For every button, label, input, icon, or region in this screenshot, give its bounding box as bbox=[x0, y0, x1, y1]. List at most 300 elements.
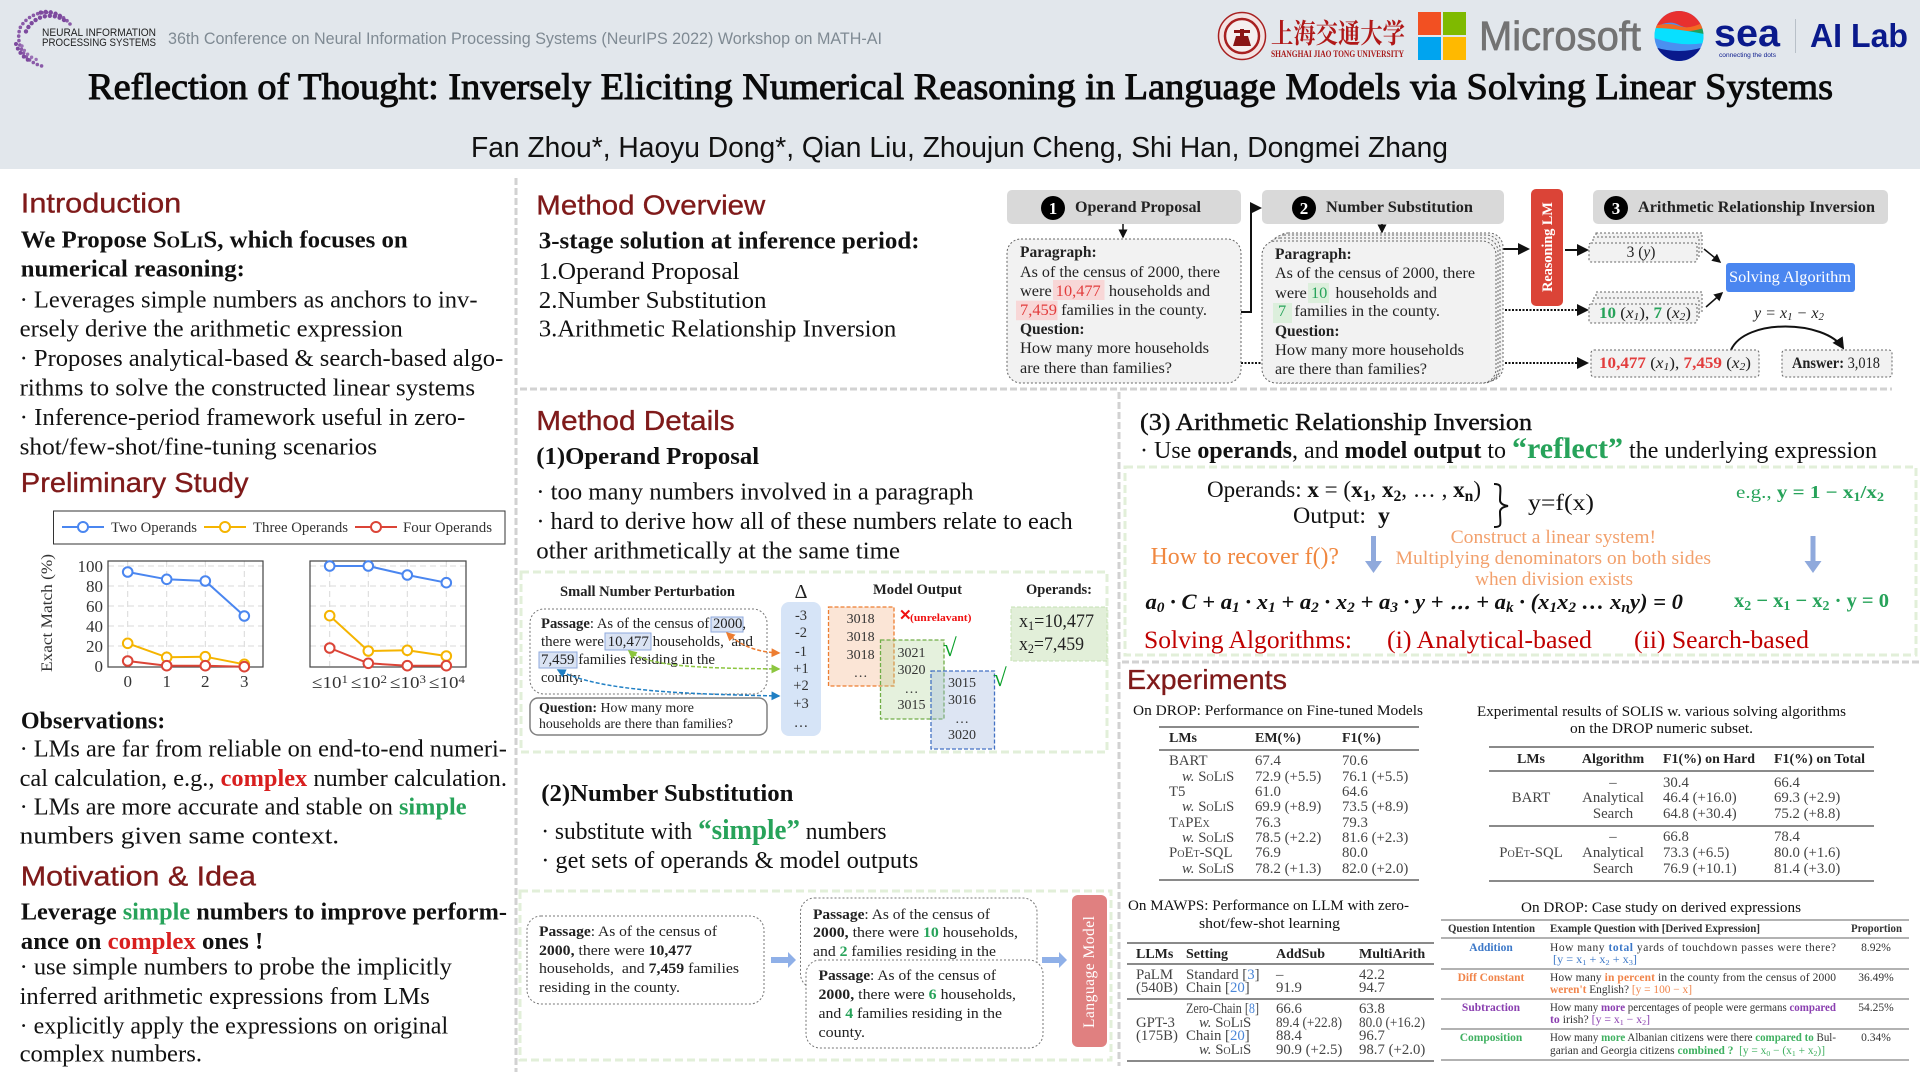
stage 1 header: Operand Proposal bbox=[1075, 199, 1202, 216]
table: DROP fine-tuned: LMs bbox=[1169, 731, 1198, 746]
Solving Algorithm box: Solving Algorithm bbox=[1729, 269, 1851, 286]
line chart: exact match by decimal places: 60 bbox=[86, 597, 103, 616]
row: subtraction: Subtraction bbox=[1462, 1002, 1521, 1014]
table: MAWPS zero-shot: 88.4 bbox=[1276, 1028, 1302, 1044]
table: MAWPS zero-shot: 80.0 (+16.2) bbox=[1359, 1015, 1425, 1031]
unrelevant mark: ✕ bbox=[899, 608, 912, 624]
text block: three stages: 3-stage solution at inference period: bbox=[539, 228, 920, 255]
table: solving algorithms: F1(%) on Total bbox=[1774, 752, 1865, 767]
line chart: exact match by magnitude: ≤10 4 bbox=[429, 673, 465, 692]
table: solving algorithms: 30.4 bbox=[1663, 775, 1689, 791]
table: MAWPS zero-shot: AddSub bbox=[1276, 947, 1325, 962]
title: Reflection of Thought: Inversely Eliciting Numerical Reasoning in Language Models via Solving Linear Systems bbox=[88, 67, 1833, 108]
text block: motivation: · use simple numbers to probe the implicitly bbox=[20, 954, 453, 981]
text block: number substitution bbox=[541, 780, 918, 874]
table: DROP fine-tuned: 64.6 bbox=[1342, 784, 1368, 800]
column headings bbox=[560, 582, 1092, 600]
table: solving algorithms: Analytical bbox=[1582, 845, 1644, 861]
table: solving algorithms: F1(%) on Hard bbox=[1663, 752, 1755, 767]
table: solving algorithms bbox=[1477, 704, 1874, 881]
text block: observations bbox=[20, 708, 507, 850]
table: DROP fine-tuned: w. SoLiS bbox=[1182, 769, 1234, 785]
icon: Sea AI Lab logo: sea bbox=[1714, 13, 1781, 55]
passage box: Passage: As of the census of 2000, bbox=[541, 616, 746, 632]
arrow to substituted passages bbox=[771, 952, 796, 968]
table: DROP fine-tuned: 61.0 bbox=[1255, 784, 1281, 800]
model output: orange group: … bbox=[854, 666, 868, 681]
heading: arithmetic relationship inversion: · Use operands, and model output to “reflect” the underlying expression bbox=[1140, 432, 1877, 465]
stage 3 header: Arithmetic Relationship Inversion bbox=[1638, 199, 1875, 216]
paragraph box 2 bbox=[1262, 233, 1503, 383]
paragraph box 1 bbox=[1007, 239, 1241, 383]
substituted passage front: and 4 families residing in the bbox=[818, 1006, 1002, 1022]
output box: substituted operands: 10 (x1), 7 (x2) bbox=[1599, 305, 1691, 323]
table: solving algorithms: 66.8 bbox=[1663, 829, 1689, 845]
stage 3 header: 3 bbox=[1612, 199, 1620, 218]
original passage box: Passage: As of the census of bbox=[539, 924, 717, 940]
icon: Microsoft logo: Microsoft bbox=[1479, 13, 1642, 59]
text block: introduction: shot/few-shot/fine-tuning scenarios bbox=[20, 433, 377, 460]
text block: motivation: inferred arithmetic expressions from LMs bbox=[20, 983, 430, 1010]
line chart: exact match by decimal places: 3 bbox=[240, 672, 249, 691]
stage 1 header: 1 bbox=[1049, 199, 1057, 218]
table: solving algorithms: Experimental results of SOLIS w. various solving algorithms bbox=[1477, 704, 1846, 720]
legend: Four Operands bbox=[403, 520, 492, 536]
stage 2 header bbox=[1262, 190, 1504, 224]
text block: motivation: · explicitly apply the expressions on original bbox=[20, 1012, 448, 1039]
row: addition: Addition bbox=[1469, 942, 1513, 954]
legend: Two Operands bbox=[111, 520, 197, 536]
paragraph box 2: 7 families in the county. bbox=[1278, 303, 1440, 320]
panel: small number perturbation bbox=[521, 572, 1107, 752]
paragraph box 1: are there than families? bbox=[1020, 360, 1172, 377]
column headings: Small Number Perturbation bbox=[560, 584, 735, 600]
table: solving algorithms: 46.4 (+16.0) bbox=[1663, 790, 1737, 806]
row: subtraction: to irish? [y = x1 − x2] bbox=[1550, 1014, 1650, 1027]
panel: middle column text bbox=[536, 189, 1073, 874]
answer box: Answer: 3,018 bbox=[1792, 355, 1880, 372]
model output: green group: 3021 bbox=[898, 646, 926, 661]
line chart: exact match by decimal places: 2 bbox=[201, 672, 210, 691]
row: addition bbox=[1469, 942, 1891, 967]
row: diff constant: weren't English? [y = 100 − x] bbox=[1550, 984, 1692, 996]
table: MAWPS zero-shot: Chain [20] bbox=[1186, 980, 1250, 996]
model output: blue group: √ bbox=[993, 665, 1007, 692]
equation example: x2 − x1 − x2 · y = 0 bbox=[1734, 590, 1889, 613]
paragraph box 1: Question: bbox=[1020, 321, 1085, 338]
row: composition: garian and Georgia citizens combined ? [y = x0 − (x1 + x2)] bbox=[1550, 1045, 1825, 1058]
icon: Sea AI Lab logo: AI Lab bbox=[1810, 17, 1908, 54]
substituted passage back bbox=[800, 898, 1037, 988]
heading: Introduction: Introduction bbox=[21, 187, 181, 218]
text block: operand proposal: · hard to derive how all of these numbers relate to each bbox=[536, 508, 1073, 535]
table: MAWPS zero-shot: On MAWPS: Performance on LLM with zero- bbox=[1128, 898, 1409, 914]
passage box bbox=[530, 609, 767, 694]
paragraph box 1: were 10,477 households and bbox=[1020, 283, 1210, 300]
table: MAWPS zero-shot: 66.6 bbox=[1276, 1001, 1302, 1017]
text block: observations: cal calculation, e.g., complex number calculation. bbox=[20, 765, 507, 792]
passage box: county. bbox=[541, 670, 583, 686]
formula y = x1 - x2: y = x1 − x2 bbox=[1752, 305, 1825, 323]
text block: number substitution: (2)Number Substitution bbox=[541, 780, 794, 807]
table: DROP fine-tuned: 78.2 (+1.3) bbox=[1255, 861, 1321, 877]
arrow down left bbox=[1365, 536, 1382, 573]
table: case study: Question Intention bbox=[1448, 923, 1536, 935]
stage 1 header bbox=[1007, 190, 1241, 224]
original operands box: 10,477 (x1), 7,459 (x2) bbox=[1599, 355, 1751, 373]
delta column: -3 bbox=[795, 608, 807, 624]
construct text: Construct a linear system! bbox=[1451, 528, 1656, 548]
example: e.g., y = 1 − x 1/x2 bbox=[1736, 482, 1884, 504]
table: DROP fine-tuned: 76.9 bbox=[1255, 845, 1281, 861]
table: MAWPS zero-shot: (540B) bbox=[1136, 980, 1178, 996]
delta column: +2 bbox=[793, 678, 809, 694]
table: DROP fine-tuned: 70.6 bbox=[1342, 753, 1368, 769]
output box: 3 (y) bbox=[1589, 233, 1702, 262]
original passage box: residing in the county. bbox=[539, 980, 680, 996]
row: diff constant bbox=[1458, 972, 1894, 996]
text block: introduction: rithms to solve the constructed linear systems bbox=[20, 375, 475, 402]
row: composition bbox=[1460, 1032, 1891, 1058]
text block: introduction: ersely derive the arithmetic expression bbox=[20, 316, 403, 343]
model output: green group: 3015 bbox=[898, 698, 926, 713]
text block: introduction: · Inference-period framework useful in zero- bbox=[20, 404, 465, 431]
Reasoning LM block: Reasoning LM bbox=[1540, 202, 1556, 292]
table: MAWPS zero-shot: w. SoLiS bbox=[1199, 1015, 1251, 1031]
table: case study: Proportion bbox=[1851, 923, 1903, 935]
table: solving algorithms: 66.4 bbox=[1774, 775, 1800, 791]
conference line: 36th Conference on Neural Information Processing Systems (NeurIPS 2022) Workshop on MATH-AI bbox=[168, 29, 882, 48]
mapping arrows bbox=[558, 633, 779, 696]
row: diff constant: 36.49% bbox=[1858, 972, 1894, 984]
row: subtraction: 54.25% bbox=[1858, 1002, 1894, 1014]
table: MAWPS zero-shot: 94.7 bbox=[1359, 980, 1385, 996]
table: MAWPS zero-shot: Zero-Chain [8] bbox=[1186, 1001, 1259, 1017]
line chart: exact match by decimal places: 20 bbox=[86, 637, 103, 656]
row: diff constant: Diff Constant bbox=[1458, 972, 1525, 984]
table: DROP fine-tuned: w. SoLiS bbox=[1182, 830, 1234, 846]
table: MAWPS zero-shot: GPT-3 bbox=[1136, 1015, 1175, 1031]
text block: number substitution: · get sets of operands & model outputs bbox=[541, 847, 918, 874]
table: DROP fine-tuned: 76.3 bbox=[1255, 815, 1281, 831]
table: solving algorithms: 69.3 (+2.9) bbox=[1774, 790, 1840, 806]
line chart: exact match by magnitude: ≤10 1 bbox=[312, 673, 348, 692]
model output: orange group: 3018 bbox=[847, 612, 875, 627]
row: composition: How many more Albanian citizens were there compared to Bul- bbox=[1550, 1032, 1836, 1044]
model output: green group: … bbox=[904, 682, 918, 697]
substituted passage back: 2000, there were 10 households, bbox=[813, 925, 1018, 941]
table: case study bbox=[1441, 900, 1909, 1060]
original passage box bbox=[527, 916, 764, 1004]
table: solving algorithms: on the DROP numeric subset. bbox=[1570, 721, 1753, 737]
original passage box: 2000, there were 10,477 bbox=[539, 943, 693, 959]
table: solving algorithms: 81.4 (+3.0) bbox=[1774, 861, 1840, 877]
table: solving algorithms: – bbox=[1608, 775, 1617, 791]
table: solving algorithms: Analytical bbox=[1582, 790, 1644, 806]
paragraph box 2: Question: bbox=[1275, 323, 1340, 340]
delta column bbox=[781, 581, 821, 736]
line chart: exact match by decimal places bbox=[39, 554, 263, 691]
model output: green group: √ bbox=[943, 635, 957, 662]
text block: introduction bbox=[20, 226, 503, 460]
table: solving algorithms: 75.2 (+8.8) bbox=[1774, 806, 1840, 822]
answer box bbox=[1782, 350, 1892, 377]
text block: number substitution: · substitute with “simple” numbers bbox=[541, 815, 887, 846]
line chart: exact match by magnitude: ≤10 2 bbox=[351, 673, 387, 692]
line chart: exact match by magnitude bbox=[310, 561, 466, 692]
column headings: Operands: bbox=[1026, 582, 1092, 598]
icon: SJTU seal and wordmark bbox=[1218, 12, 1405, 60]
text block: observations: · LMs are far from reliable on end-to-end numeri- bbox=[20, 736, 507, 763]
construct text: Multiplying denominators on both sides bbox=[1396, 549, 1711, 569]
text block: observations: Observations: bbox=[21, 708, 165, 735]
text block: three stages: 3.Arithmetic Relationship Inversion bbox=[539, 316, 896, 343]
table: DROP fine-tuned: 72.9 (+5.5) bbox=[1255, 769, 1321, 785]
table: DROP fine-tuned bbox=[1133, 703, 1423, 880]
question box: Question: How many more bbox=[539, 701, 694, 716]
row: addition: [y = x1 + x2 + x3] bbox=[1553, 954, 1637, 967]
operands result bbox=[1011, 607, 1107, 661]
text block: introduction: numerical reasoning: bbox=[21, 256, 245, 283]
icon: NeurIPS logo: PROCESSING SYSTEMS bbox=[42, 37, 156, 49]
table: MAWPS zero-shot: Standard [3] bbox=[1186, 967, 1260, 983]
substituted passage back: Passage: As of the census of bbox=[813, 907, 990, 923]
table: case study: On DROP: Case study on derived expressions bbox=[1521, 900, 1801, 916]
heading: Method Overview: Method Overview bbox=[536, 189, 766, 220]
table: DROP fine-tuned: TaPEx bbox=[1169, 815, 1211, 831]
row: subtraction bbox=[1462, 1002, 1894, 1027]
delta column: -2 bbox=[795, 625, 807, 641]
table: solving algorithms: 64.8 (+30.4) bbox=[1663, 806, 1737, 822]
table: MAWPS zero-shot: 42.2 bbox=[1359, 967, 1385, 983]
table: solving algorithms: – bbox=[1608, 829, 1617, 845]
table: MAWPS zero-shot: w. SoLiS bbox=[1199, 1042, 1251, 1058]
delta column: … bbox=[794, 715, 808, 731]
table: DROP fine-tuned: 81.6 (+2.3) bbox=[1342, 830, 1408, 846]
substituted passage back: and 2 families residing in the bbox=[813, 944, 996, 960]
table: MAWPS zero-shot: MultiArith bbox=[1359, 947, 1425, 962]
paragraph box 2: were 10 households and bbox=[1275, 285, 1437, 302]
text block: introduction: · Leverages simple numbers as anchors to inv- bbox=[20, 286, 478, 313]
operands and output bbox=[1207, 477, 1481, 528]
text block: observations: numbers given same context. bbox=[20, 823, 339, 850]
construct text bbox=[1396, 528, 1711, 590]
model output: blue group: … bbox=[955, 712, 969, 727]
row: diff constant: How many in percent in the county from the census of 2000 bbox=[1550, 972, 1836, 984]
table: DROP fine-tuned: T5 bbox=[1169, 784, 1185, 800]
row: subtraction: How many more percentages of people were germans compared bbox=[1550, 1002, 1837, 1014]
heading: Experiments: Experiments bbox=[1127, 664, 1287, 695]
text block: motivation bbox=[20, 899, 507, 1068]
heading: Preliminary Study: Preliminary Study bbox=[21, 467, 250, 498]
table: solving algorithms: 80.0 (+1.6) bbox=[1774, 845, 1840, 861]
paragraph box 1: As of the census of 2000, there bbox=[1020, 264, 1220, 281]
table: MAWPS zero-shot: 98.7 (+2.0) bbox=[1359, 1042, 1425, 1058]
table: solving algorithms: Algorithm bbox=[1582, 752, 1644, 767]
model output: orange group: 3018 bbox=[847, 648, 875, 663]
stage 2 header: 2 bbox=[1300, 199, 1308, 218]
Solving Algorithm box bbox=[1726, 263, 1855, 292]
icon: Sea AI Lab logo: connecting the dots bbox=[1719, 53, 1776, 59]
passage box: there were 10,477 households, and bbox=[541, 634, 754, 650]
solving algorithms: Solving Algorithms: bbox=[1144, 627, 1352, 654]
column headings: Model Output bbox=[873, 582, 962, 598]
line chart: exact match by decimal places: 1 bbox=[162, 672, 171, 691]
Language Model block bbox=[1072, 895, 1107, 1047]
panel: method overview diagram bbox=[1007, 189, 1892, 383]
heading: arithmetic relationship inversion bbox=[1140, 410, 1877, 465]
panel: left column bbox=[20, 187, 507, 1068]
table: DROP fine-tuned: 67.4 bbox=[1255, 753, 1281, 769]
delta column: +1 bbox=[793, 661, 809, 677]
table: MAWPS zero-shot: 96.7 bbox=[1359, 1028, 1385, 1044]
paragraph box 1: How many more households bbox=[1020, 340, 1209, 357]
authors: Fan Zhou*, Haoyu Dong*, Qian Liu, Zhoujun Cheng, Shi Han, Dongmei Zhang bbox=[471, 132, 1448, 164]
text block: three stages: 1.Operand Proposal bbox=[539, 258, 740, 285]
icon: SJTU seal and wordmark: SHANGHAI JIAO TONG UNIVERSITY bbox=[1271, 49, 1404, 59]
model output: green group bbox=[880, 635, 957, 719]
text block: motivation: Leverage simple numbers to improve perform- bbox=[21, 899, 507, 926]
passage box: 7,459 families residing in the bbox=[541, 652, 715, 668]
table: DROP fine-tuned: 69.9 (+8.9) bbox=[1255, 799, 1321, 815]
substituted passage front bbox=[806, 960, 1043, 1048]
stage 2 header: Number Substitution bbox=[1326, 199, 1473, 216]
text block: observations: · LMs are more accurate and stable on simple bbox=[20, 793, 467, 820]
substituted passage front: county. bbox=[818, 1025, 865, 1041]
table: DROP fine-tuned: 82.0 (+2.0) bbox=[1342, 861, 1408, 877]
unrelevant mark: (unrelavant) bbox=[910, 612, 972, 624]
brace bbox=[1494, 484, 1508, 527]
text block: operand proposal bbox=[536, 443, 1073, 564]
function label: y=f(x) bbox=[1528, 490, 1594, 515]
output box: substituted operands bbox=[1589, 292, 1702, 323]
paragraph box 2: As of the census of 2000, there bbox=[1275, 265, 1475, 282]
how to recover: How to recover f()? bbox=[1151, 544, 1339, 570]
original passage box: households, and 7,459 families bbox=[539, 961, 739, 977]
model output: orange group bbox=[828, 607, 894, 686]
table: MAWPS zero-shot: – bbox=[1275, 967, 1284, 983]
legend: Three Operands bbox=[253, 520, 348, 536]
heading: arithmetic relationship inversion: (3) Arithmetic Relationship Inversion bbox=[1140, 410, 1532, 436]
model output: blue group: 3015 bbox=[948, 676, 976, 691]
y axis label: Exact Match (%) bbox=[39, 554, 56, 672]
table: MAWPS zero-shot: 89.4 (+22.8) bbox=[1276, 1015, 1342, 1031]
text block: introduction: · Proposes analytical-based & search-based algo- bbox=[20, 345, 503, 372]
icon: NeurIPS logo: NEURAL INFORMATION bbox=[42, 27, 156, 39]
model output: blue group: 3016 bbox=[948, 693, 976, 708]
Reasoning LM block bbox=[1531, 189, 1563, 306]
table: MAWPS zero-shot: PaLM bbox=[1136, 967, 1173, 983]
heading: Method Details: Method Details bbox=[536, 405, 735, 436]
table: MAWPS zero-shot bbox=[1127, 898, 1434, 1061]
solving algorithms bbox=[1144, 627, 1810, 654]
original operands box bbox=[1591, 350, 1759, 377]
delta column: +3 bbox=[793, 696, 809, 712]
panel: number substitution bbox=[520, 891, 1111, 1060]
equation: a0 · C + a1 · x1 + a2 · x2 + a3 · y + ⋯ + ak · (x1x2 … xny) = 0 bbox=[1146, 589, 1683, 616]
table: solving algorithms: 73.3 (+6.5) bbox=[1663, 845, 1729, 861]
operands and output: Output: y bbox=[1293, 503, 1391, 528]
text block: three stages bbox=[539, 228, 920, 343]
legend bbox=[54, 511, 505, 544]
icon: Microsoft logo bbox=[1418, 12, 1642, 60]
table: solving algorithms: Search bbox=[1593, 861, 1634, 877]
table: MAWPS zero-shot: Chain [20] bbox=[1186, 1028, 1250, 1044]
table: DROP fine-tuned: EM(%) bbox=[1255, 731, 1301, 746]
question box bbox=[530, 698, 767, 735]
text block: operand proposal: (1)Operand Proposal bbox=[536, 443, 759, 470]
model output: blue group: 3020 bbox=[948, 728, 976, 743]
heading: Motivation & Idea: Motivation & Idea bbox=[21, 860, 256, 891]
text block: operand proposal: other arithmetically at the same time bbox=[536, 537, 900, 564]
solving algorithms: (ii) Search-based bbox=[1634, 627, 1810, 654]
icon: SJTU seal and wordmark: 上海交通大学 bbox=[1271, 12, 1405, 51]
line chart: exact match by decimal places: 40 bbox=[86, 617, 103, 636]
line chart: exact match by decimal places: 0 bbox=[123, 672, 132, 691]
paragraph box 2: are there than families? bbox=[1275, 361, 1427, 378]
table: DROP fine-tuned: w. SoLiS bbox=[1182, 799, 1234, 815]
operands and output: Operands: x = (x1, x2, … , xn) bbox=[1207, 477, 1481, 505]
row: composition: Composition bbox=[1460, 1032, 1523, 1044]
table: solving algorithms: LMs bbox=[1517, 752, 1546, 767]
table: DROP fine-tuned: On DROP: Performance on Fine-tuned Models bbox=[1133, 703, 1423, 719]
text block: three stages: 2.Number Substitution bbox=[539, 287, 767, 314]
substituted passage front: Passage: As of the census of bbox=[818, 968, 996, 984]
row: addition: How many total yards of touchdown passes were there? bbox=[1550, 942, 1836, 954]
text block: operand proposal: · too many numbers involved in a paragraph bbox=[536, 479, 973, 506]
line chart: exact match by decimal places: 80 bbox=[86, 577, 103, 596]
line chart: exact match by decimal places: 0 bbox=[94, 657, 103, 676]
panel: linear system bbox=[1125, 467, 1916, 655]
table: solving algorithms: 78.4 bbox=[1774, 829, 1800, 845]
substituted passage front: 2000, there were 6 households, bbox=[818, 987, 1016, 1003]
line chart: exact match by decimal places: 100 bbox=[78, 557, 103, 576]
paragraph box 1: Paragraph: bbox=[1020, 244, 1097, 261]
table: DROP fine-tuned: PoEt-SQL bbox=[1169, 845, 1232, 861]
arrow to language model bbox=[1042, 952, 1067, 968]
arrow down right bbox=[1804, 536, 1822, 573]
table: DROP fine-tuned: 73.5 (+8.9) bbox=[1342, 799, 1408, 815]
table: MAWPS zero-shot: shot/few-shot learning bbox=[1199, 916, 1340, 932]
table: solving algorithms: BART bbox=[1512, 790, 1550, 806]
text block: motivation: ance on complex ones ! bbox=[21, 928, 263, 955]
paragraph box 2: Paragraph: bbox=[1275, 246, 1352, 263]
table: DROP fine-tuned: F1(%) bbox=[1342, 731, 1381, 746]
table: DROP fine-tuned: 79.3 bbox=[1342, 815, 1368, 831]
connector arrows bbox=[1123, 208, 1843, 363]
operands result: x2=7,459 bbox=[1019, 634, 1084, 656]
table: case study: Example Question with [Derived Expression] bbox=[1550, 923, 1760, 935]
table: DROP fine-tuned: 78.5 (+2.2) bbox=[1255, 830, 1321, 846]
table: MAWPS zero-shot: 91.9 bbox=[1276, 980, 1302, 996]
model output: green group: 3020 bbox=[898, 663, 926, 678]
table: MAWPS zero-shot: (175B) bbox=[1136, 1028, 1178, 1044]
solving algorithms: (i) Analytical-based bbox=[1387, 627, 1593, 654]
table: solving algorithms: Search bbox=[1593, 806, 1634, 822]
question box: households are there than families? bbox=[539, 717, 733, 732]
icon: NeurIPS logo bbox=[16, 12, 156, 66]
construct text: when division exists bbox=[1475, 570, 1633, 590]
table: DROP fine-tuned: BART bbox=[1169, 753, 1208, 769]
table: DROP fine-tuned: 76.1 (+5.5) bbox=[1342, 769, 1408, 785]
model output: orange group: 3018 bbox=[847, 630, 875, 645]
operands result: x1=10,477 bbox=[1019, 611, 1094, 633]
paragraph box 2: How many more households bbox=[1275, 342, 1464, 359]
table: MAWPS zero-shot: 63.8 bbox=[1359, 1001, 1385, 1017]
table: solving algorithms: PoEt-SQL bbox=[1499, 845, 1563, 861]
model output: blue group bbox=[931, 665, 1007, 749]
text block: introduction: We Propose SoLiS, which focuses on bbox=[21, 226, 408, 253]
